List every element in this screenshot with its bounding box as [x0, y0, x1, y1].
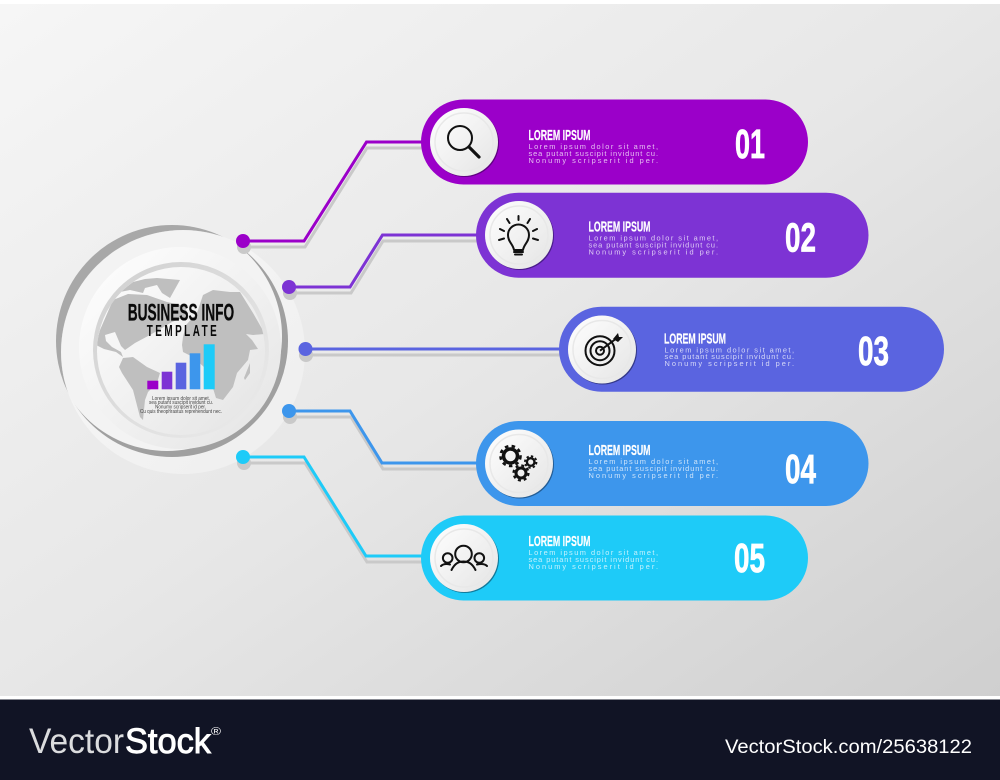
number: 03: [858, 328, 889, 374]
number: 01: [735, 121, 765, 167]
text block: [588, 442, 718, 480]
icon: light bulb: [485, 201, 554, 270]
connector: 01: [243, 142, 424, 247]
number: 04: [785, 446, 816, 492]
connector: 04: [289, 411, 478, 469]
icon: people: [430, 524, 499, 593]
globe caption: sea putant suscipit invidunt cu.: [149, 400, 213, 406]
heading: [128, 300, 234, 340]
footer logo: [29, 722, 221, 761]
footer image id: VectorStock.com/25638122: [725, 737, 972, 758]
panel: item 04: [476, 421, 868, 506]
text block: Nonumy scripserit id per.: [528, 562, 658, 571]
connector dots: [236, 234, 313, 470]
text block: [528, 533, 658, 571]
panel: item 05: [421, 516, 808, 600]
text block: LOREM IPSUM: [588, 219, 650, 236]
text block: sea putant suscipit invidunt cu.: [664, 352, 794, 361]
footer bar: [0, 700, 1000, 780]
text block: Lorem ipsum dolor sit amet,: [588, 457, 718, 466]
text block: Lorem ipsum dolor sit amet,: [664, 346, 794, 354]
icon: gears: [485, 430, 554, 498]
text block: Lorem ipsum dolor sit amet,: [528, 548, 658, 557]
connector: 02: [289, 235, 478, 293]
text block: [664, 330, 794, 368]
text block: sea putant suscipit invidunt cu.: [528, 149, 658, 158]
text block: Lorem ipsum dolor sit amet,: [528, 142, 658, 151]
text block: [528, 127, 658, 165]
outer ring: [56, 225, 288, 457]
text block: sea putant suscipit invidunt cu.: [588, 464, 718, 473]
text block: Nonumy scripserit id per.: [588, 471, 718, 480]
text block: sea putant suscipit invidunt cu.: [588, 240, 718, 250]
text block: sea putant suscipit invidunt cu.: [528, 555, 658, 564]
text block: LOREM IPSUM: [528, 533, 590, 550]
icon: magnifier: [430, 108, 499, 177]
globe caption: [140, 396, 222, 415]
text block: Nonumy scripserit id per.: [588, 247, 718, 256]
text block: LOREM IPSUM: [588, 442, 650, 459]
footer logo: Stock: [125, 722, 211, 761]
number: 05: [734, 535, 765, 581]
panel: item 02: [476, 193, 868, 278]
globe caption: Cu quis theophrastus reprehendunt nec.: [140, 409, 222, 415]
text block: LOREM IPSUM: [528, 127, 590, 144]
text block: LOREM IPSUM: [664, 330, 726, 347]
footer logo: Vector: [29, 722, 124, 761]
text block: Nonumy scripserit id per.: [528, 156, 658, 165]
text block: Lorem ipsum dolor sit amet,: [588, 234, 718, 242]
panel: item 03: [559, 307, 944, 392]
connector: 05: [243, 457, 424, 562]
world map: [96, 278, 265, 420]
text block: Nonumy scripserit id per.: [664, 359, 794, 368]
panel: item 01: [421, 100, 808, 184]
globe caption: Lorem ipsum dolor sit amet,: [152, 396, 210, 402]
heading: BUSINESS INFO: [128, 300, 234, 326]
central globe emblem: [56, 225, 288, 457]
text block: [588, 219, 718, 256]
footer logo: ®: [211, 726, 221, 738]
connector: 03: [305, 349, 561, 355]
inner disc: [79, 247, 281, 449]
icon: target: [568, 316, 637, 384]
bar chart: [147, 344, 215, 389]
heading: TEMPLATE: [147, 322, 217, 340]
globe caption: Nonumy scripserit id per.: [155, 405, 206, 411]
number: 02: [785, 214, 816, 260]
